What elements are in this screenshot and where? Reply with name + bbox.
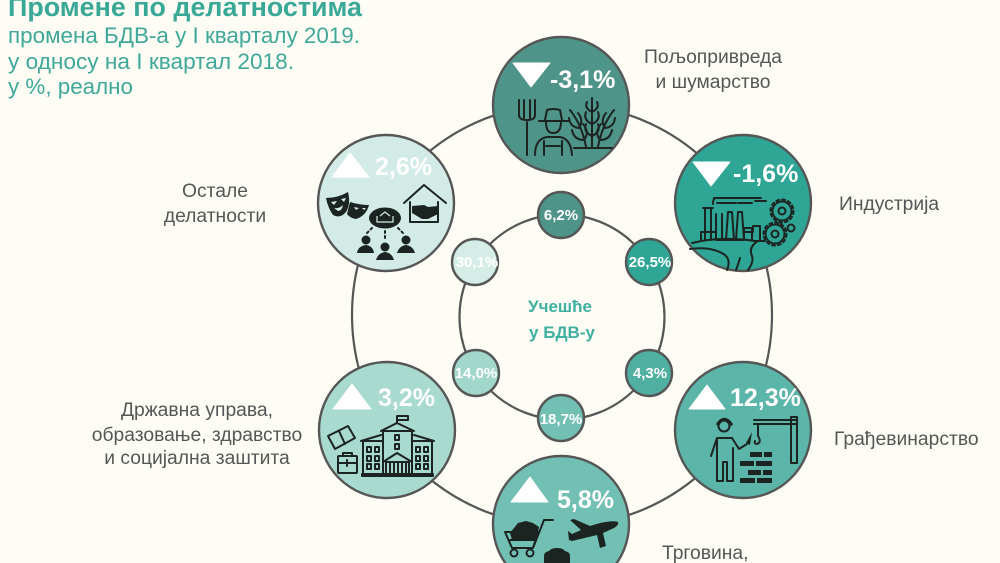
share: other: 30,1%	[456, 254, 498, 271]
share: industry: 26,5%	[629, 254, 671, 271]
panel: agriculture	[493, 37, 629, 173]
inner ring	[460, 214, 664, 420]
label: public administration: и социјална заштита	[104, 448, 290, 469]
label: public administration: Државна управа,	[121, 400, 273, 421]
label: public administration	[92, 400, 302, 469]
icon: farmer and wheat	[519, 98, 615, 155]
center label	[528, 297, 595, 342]
label: public administration: образовање, здравство	[92, 425, 302, 446]
panel: trade: 5,8%	[557, 486, 614, 514]
label: construction: Грађевинарство	[834, 429, 979, 450]
panel: industry	[675, 135, 811, 271]
share: public administration: 14,0%	[455, 365, 497, 382]
panel: other activities: 2,6%	[375, 153, 432, 181]
icon: factory and gears	[690, 198, 794, 270]
center label: Учешће	[528, 297, 592, 316]
share: agriculture	[538, 192, 584, 238]
center label: у БДВ-у	[529, 323, 595, 342]
share: agriculture: 6,2%	[544, 207, 578, 224]
label: agriculture	[644, 47, 782, 93]
share: trade: 18,7%	[540, 411, 582, 428]
panel: construction: 12,3%	[730, 384, 801, 412]
icon: book, first aid and building	[328, 416, 434, 476]
share: other	[452, 239, 498, 285]
share: trade	[538, 395, 584, 441]
share: construction: 4,3%	[633, 365, 667, 382]
share: construction	[626, 350, 672, 396]
subtitle: промена БДВ-а у I кварталу 2019.	[8, 23, 360, 48]
panel: public administration	[319, 362, 455, 498]
label: other activities: Остале	[182, 181, 248, 202]
panel: trade	[493, 456, 629, 563]
outer ring	[352, 104, 772, 526]
panel: industry: -1,6%	[733, 160, 798, 188]
icon: worker, crane and bricks	[711, 417, 797, 483]
panel: other activities	[318, 135, 454, 271]
label: industry: Индустрија	[839, 194, 939, 215]
share: industry	[626, 239, 672, 285]
label: other activities: делатности	[164, 206, 266, 227]
subtitle: у %, реално	[8, 74, 133, 99]
subtitle	[8, 23, 360, 99]
icon: masks, house and people	[326, 185, 446, 260]
subtitle: у односу на I квартал 2018.	[8, 49, 294, 74]
share: public administration	[453, 350, 499, 396]
label: other activities	[164, 181, 266, 227]
panel: construction	[675, 362, 811, 498]
icon: cart, plane and suitcase	[505, 519, 618, 563]
panel: agriculture: -3,1%	[550, 66, 615, 94]
panel: public administration: 3,2%	[378, 384, 435, 412]
label: agriculture: Пољопривреда	[644, 47, 782, 68]
label: agriculture: и шумарство	[656, 72, 770, 93]
